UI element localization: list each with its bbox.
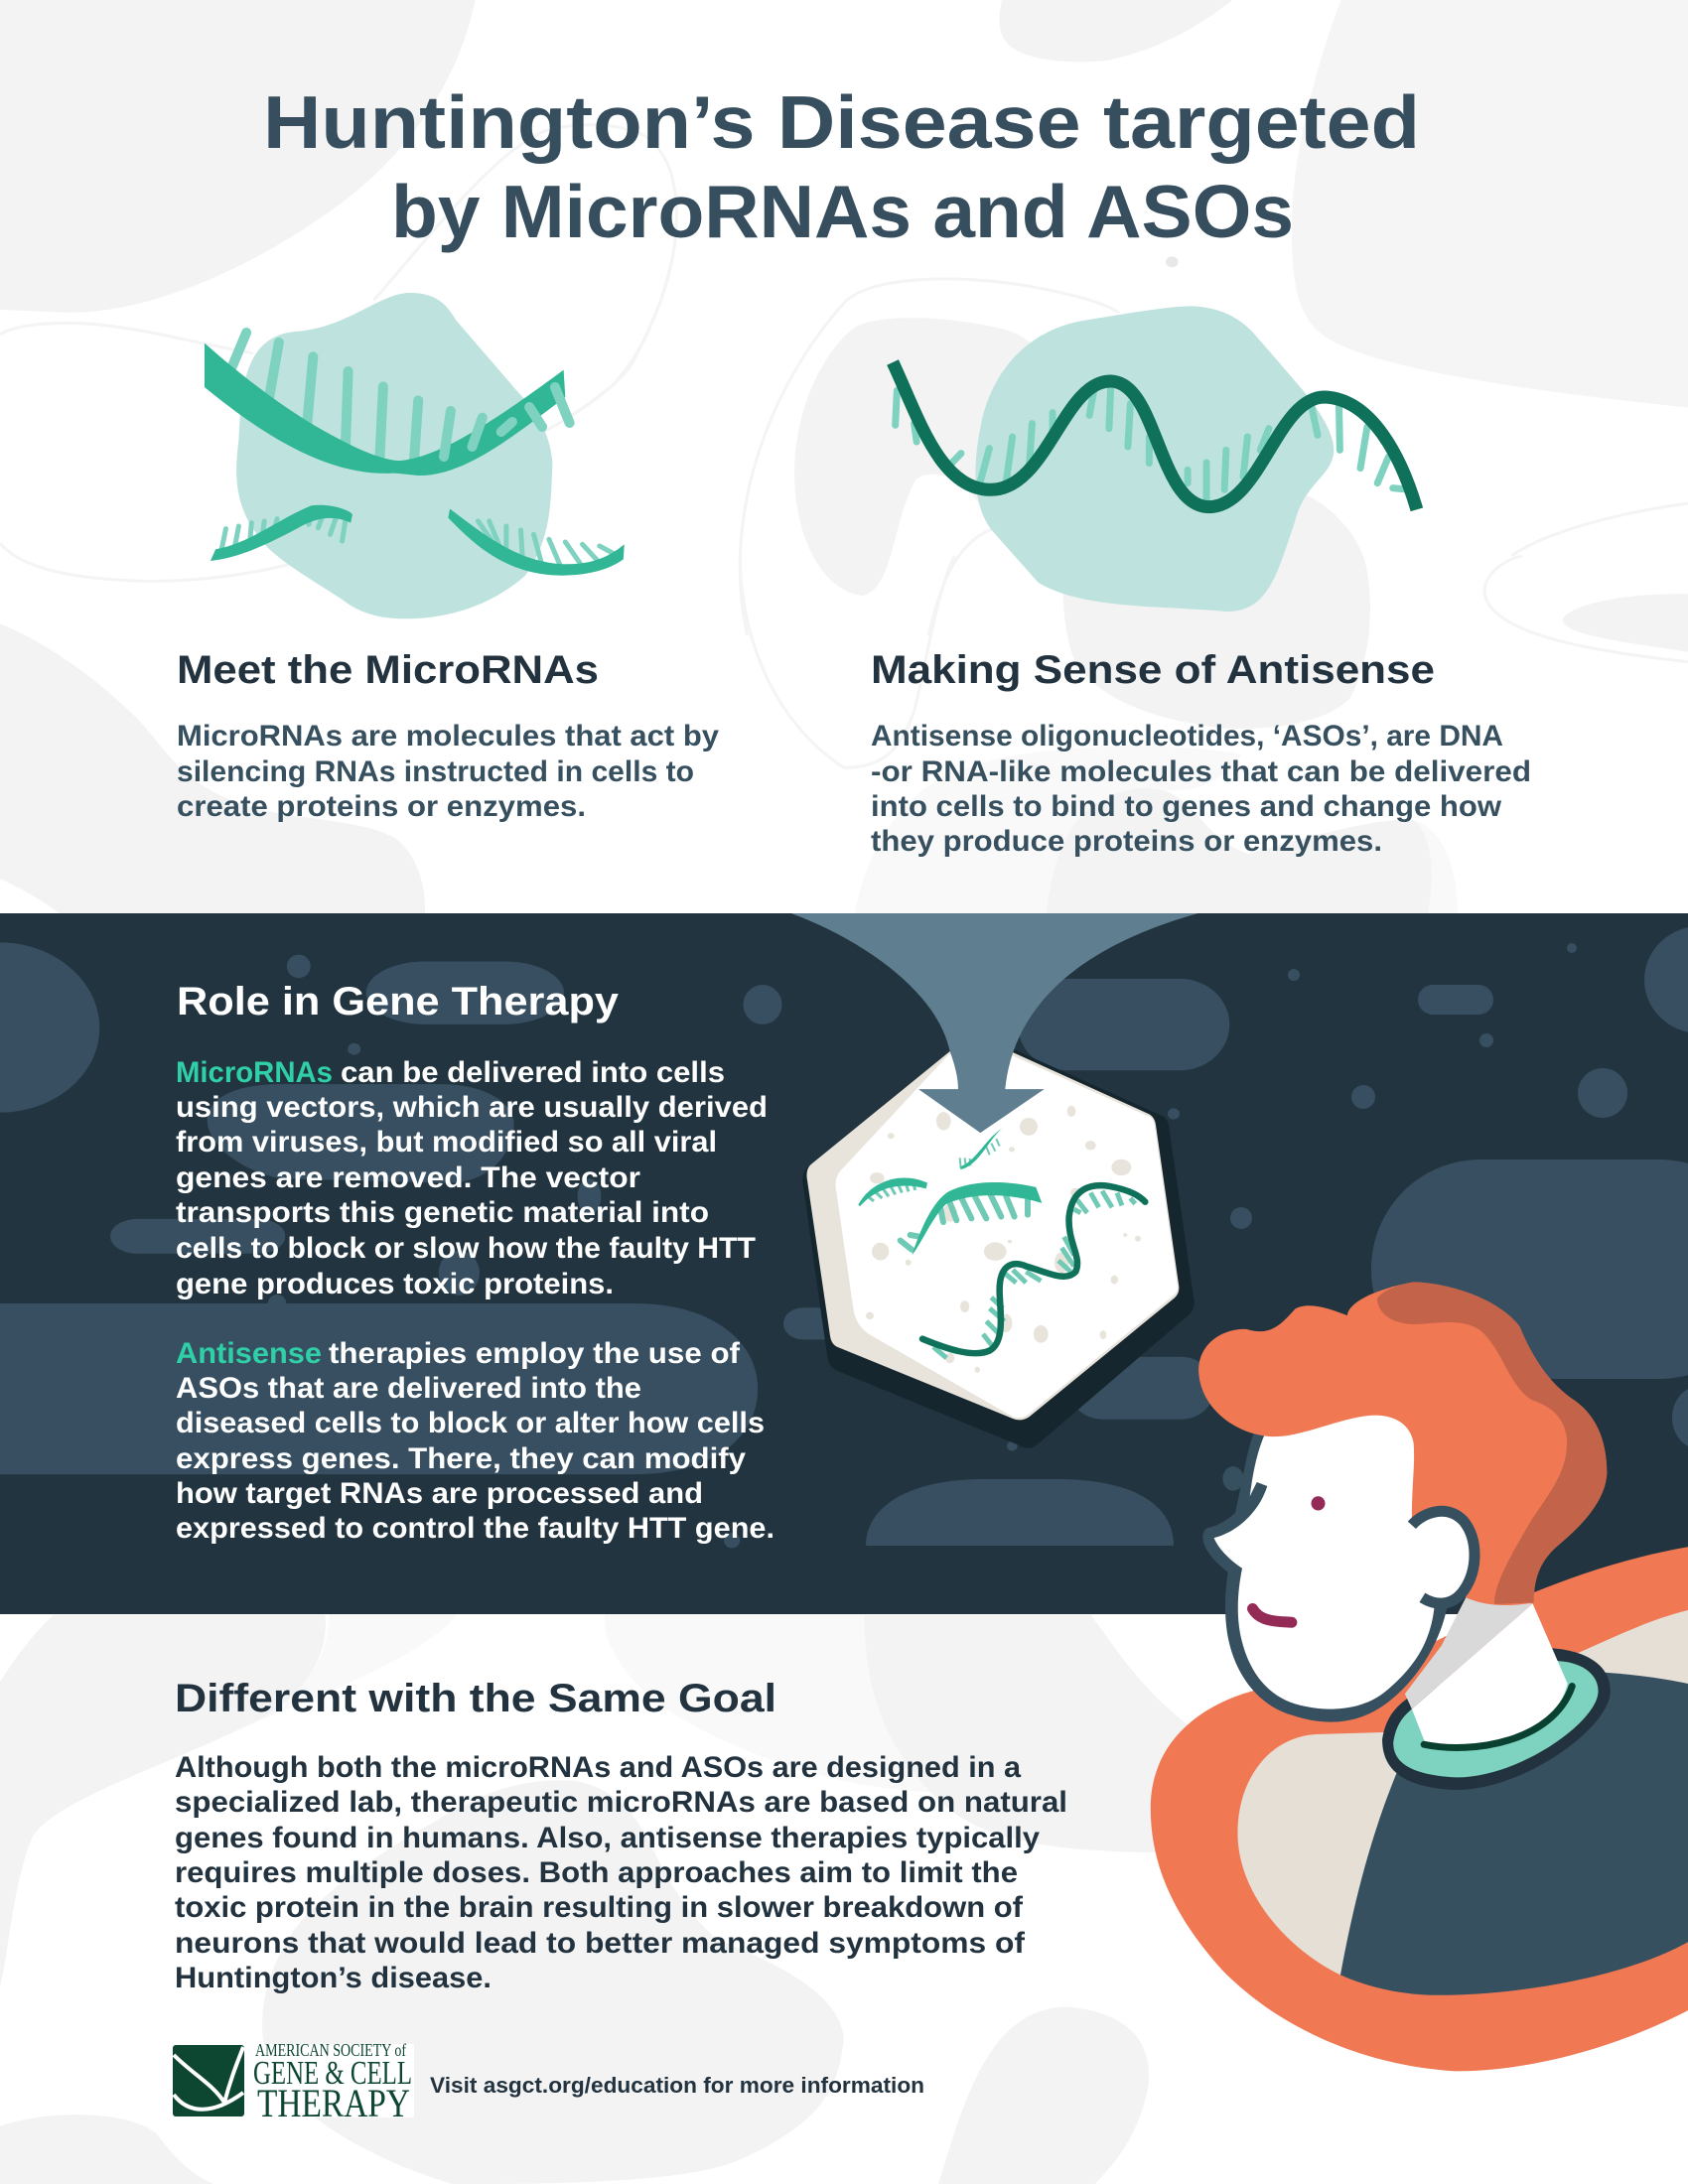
text block: antisense delivery: how target RNAs are processed and xyxy=(176,1477,703,1510)
hexagon shadow xyxy=(802,1038,1195,1448)
small strand left rungs xyxy=(221,511,346,549)
funnel arrow xyxy=(791,913,1198,1133)
text block: comparison xyxy=(175,1751,1067,1994)
text block: antisense delivery: express genes. There, they can modify xyxy=(176,1442,746,1475)
antisense rungs xyxy=(896,387,1410,499)
title: by MicroRNAs and ASOs xyxy=(391,170,1294,253)
person illustration xyxy=(1151,1282,1688,2071)
text block: comparison: requires multiple doses. Both approaches aim to limit the xyxy=(175,1856,1018,1889)
title: Huntington’s Disease targeted xyxy=(263,80,1420,164)
text block: comparison: genes found in humans. Also, antisense therapies typically xyxy=(175,1822,1040,1854)
text block: antisense description: into cells to bind to genes and change how xyxy=(871,790,1502,823)
text block: microRNA delivery: using vectors, which are usually derived xyxy=(176,1091,768,1124)
ear xyxy=(1412,1511,1475,1603)
text block: microRNA description xyxy=(177,720,719,823)
text block: antisense description xyxy=(871,720,1531,858)
illustration: antisense strand xyxy=(893,306,1417,612)
small ribbon right xyxy=(448,509,625,576)
small ribbon left xyxy=(211,505,352,561)
large ribbon xyxy=(205,343,565,476)
eye xyxy=(1311,1496,1326,1511)
text block: antisense delivery: Antisense xyxy=(176,1337,322,1370)
small strand right rungs xyxy=(478,521,615,568)
text block: microRNA description: create proteins or enzymes. xyxy=(177,790,586,823)
text block: comparison: Huntington’s disease. xyxy=(175,1962,492,1994)
text block: antisense delivery: therapies employ the use of xyxy=(329,1337,741,1370)
text block: microRNA delivery: genes are removed. The vector xyxy=(176,1161,640,1194)
mouth xyxy=(1253,1609,1292,1622)
left hex strand xyxy=(858,1177,927,1206)
large strand rungs xyxy=(232,333,418,462)
text block: microRNA delivery: can be delivered into cells xyxy=(341,1056,725,1089)
text block: microRNA delivery: gene produces toxic proteins. xyxy=(176,1268,614,1300)
text block: antisense description: -or RNA-like molecules that can be delivered xyxy=(871,755,1531,788)
face xyxy=(1214,1398,1442,1709)
text block: comparison: neurons that would lead to better managed symptoms of xyxy=(175,1927,1026,1960)
title xyxy=(263,80,1420,253)
text block: antisense description: they produce proteins or enzymes. xyxy=(871,825,1382,858)
logo wordmark: AMERICAN SOCIETY of xyxy=(255,2040,406,2060)
body: orange jacket xyxy=(1151,1547,1688,2071)
shirt xyxy=(1340,1672,1688,1995)
text block: microRNA delivery: from viruses, but modified so all viral xyxy=(176,1126,717,1159)
jacket beige lining xyxy=(1237,1610,1688,1975)
panel: role in gene therapy band xyxy=(0,913,1688,1614)
heading: Role in Gene Therapy: Role in Gene Therapy xyxy=(177,980,620,1024)
text block: microRNA description: silencing RNAs instructed in cells to xyxy=(177,755,694,788)
heading: Different with the Same Goal: Different with the Same Goal xyxy=(175,1677,776,1720)
text block: antisense delivery: diseased cells to block or alter how cells xyxy=(176,1407,765,1439)
logo mark xyxy=(173,2045,244,2116)
hexagon cell with RNA strands xyxy=(791,913,1198,1448)
hexagon beige edge xyxy=(806,1040,1179,1420)
text block: antisense delivery: ASOs that are delivered into the xyxy=(176,1372,641,1405)
large strand front rungs xyxy=(444,387,570,457)
logo wordmark: THERAPY xyxy=(257,2081,410,2125)
hexagon white face xyxy=(836,1044,1178,1418)
text block: comparison: Although both the microRNAs and ASOs are designed in a xyxy=(175,1751,1021,1784)
heading: Making Sense of Antisense: Making Sense of Antisense xyxy=(871,648,1435,692)
teal blob: microRNA xyxy=(236,293,552,618)
antisense backbone xyxy=(893,362,1417,509)
neck shadow xyxy=(1405,1597,1533,1709)
collar teal xyxy=(1393,1661,1599,1777)
text block: microRNA delivery: cells to block or slow how the faulty HTT xyxy=(176,1232,756,1265)
teal blob: antisense xyxy=(975,306,1334,612)
logo: ASGCT xyxy=(173,2040,414,2125)
text block: comparison: specialized lab, therapeutic microRNAs are based on natural xyxy=(175,1786,1067,1819)
face outline xyxy=(1222,1466,1243,1491)
collar line xyxy=(1424,1687,1572,1747)
text block: comparison: toxic protein in the brain resulting in slower breakdown of xyxy=(175,1891,1024,1924)
cell speckles xyxy=(866,1106,1141,1373)
logo wordmark xyxy=(253,2040,412,2125)
hair xyxy=(1198,1282,1607,1605)
text block: microRNA description: MicroRNAs are molecules that act by xyxy=(177,720,719,752)
neck xyxy=(1412,1603,1568,1747)
text block: antisense delivery: expressed to control the faulty HTT gene. xyxy=(176,1512,774,1545)
main hex strand xyxy=(901,1182,1042,1255)
hair shade xyxy=(1377,1282,1607,1604)
collar outer xyxy=(1382,1648,1611,1790)
illustration: microRNA strands xyxy=(205,293,625,618)
logo wordmark: GENE & CELL xyxy=(253,2055,412,2092)
text block: microRNA delivery: MicroRNAs xyxy=(176,1056,333,1089)
heading: Meet the MicroRNAs: Meet the MicroRNAs xyxy=(177,648,599,692)
text block: antisense description: Antisense oligonucleotides, ‘ASOs’, are DNA xyxy=(871,720,1503,752)
small top strand xyxy=(960,1129,1002,1169)
text block: microRNA delivery: transports this genetic material into xyxy=(176,1196,709,1229)
dark hex strand xyxy=(922,1185,1145,1358)
text block: microRNA delivery xyxy=(176,1056,768,1300)
text block: antisense delivery xyxy=(176,1337,774,1545)
footer link text: Visit asgct.org/education for more information xyxy=(430,2073,924,2098)
